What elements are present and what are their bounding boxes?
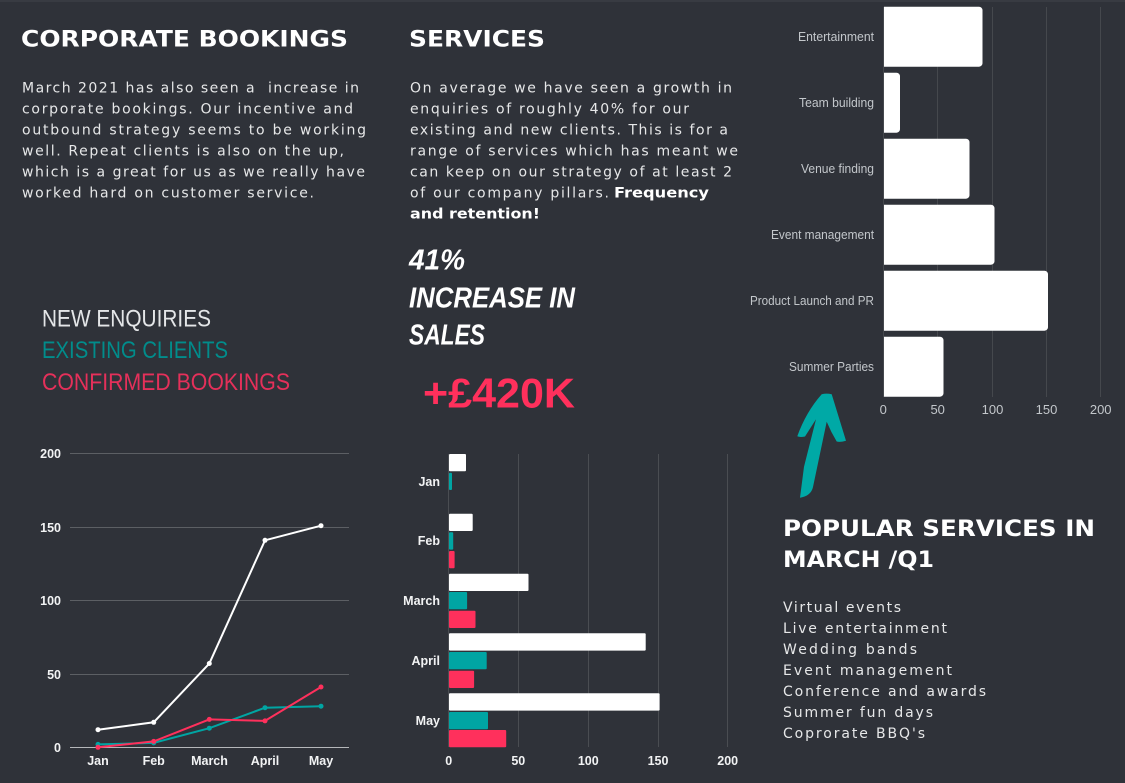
bar chart value axis labels: 100 [578,754,599,768]
bar chart month labels: April [412,654,440,668]
line chart: monthly trend [40,447,349,768]
line chart x axis labels: Feb [143,754,165,768]
heading: popular services: MARCH /Q1 [783,547,934,573]
heading: corporate bookings: CORPORATE BOOKINGS [21,26,348,52]
line chart y axis labels: 150 [40,521,61,535]
service value axis labels: 100 [982,402,1003,417]
list: popular services: Event management [783,663,952,679]
heading: popular services: POPULAR SERVICES IN [783,516,1095,542]
series: existing clients [96,704,324,747]
bar chart value axis labels: 0 [445,754,452,768]
text block: services description: range of services which has meant we [410,144,738,160]
text block: corporate bookings description [22,80,366,202]
text block: services description: On average we have seen a growth in [410,80,732,96]
bar chart value axis labels [445,754,738,768]
list: popular services: Coprorate BBQ's [783,726,925,742]
service value axis labels: 0 [880,402,887,417]
heading: popular services [783,516,1095,573]
legend: existing clients: EXISTING CLIENTS [42,337,228,364]
bars: services values [884,7,1048,397]
arrow: pointing up to services chart [797,394,846,498]
heading: services: SERVICES [409,26,545,52]
bars: February [449,514,473,568]
bar chart month labels [403,475,440,728]
panel: popular services [783,516,1095,742]
callout: 41% increase in sales: SALES [409,320,486,352]
list: popular services: Live entertainment [783,621,948,637]
bar chart value axis labels: 150 [648,754,668,768]
line chart x axis labels [87,754,333,768]
text block: services description: Frequency [614,186,709,202]
line chart x axis labels: Jan [87,754,109,768]
callout: +£420K: +£420K [423,369,575,416]
bar chart: monthly comparison [403,454,738,768]
text block: services description [410,80,738,222]
service category labels: Product Launch and PR [750,293,874,308]
bar chart value axis labels: 200 [717,754,738,768]
panel: corporate bookings [21,26,366,202]
list: popular services: Wedding bands [783,642,917,658]
text block: corporate bookings description: March 2021 has also seen a increase in [22,80,359,96]
panel: services [408,26,738,416]
text block: corporate bookings description: outbound strategy seems to be working [22,122,366,138]
text block: services description: enquiries of roughly 40% for our [410,102,689,118]
text block: services description: of our company pillars. [410,186,609,202]
line chart y axis labels: 100 [40,594,61,608]
text block: corporate bookings description: corporate bookings. Our incentive and [22,102,353,118]
bars: April [449,633,646,688]
callout: 41% increase in sales: 41% [408,244,465,276]
list: popular services [783,600,986,742]
callout: 41% increase in sales: INCREASE IN [409,282,576,314]
text block: corporate bookings description: which is a great for us as we really have [22,164,365,180]
line chart x axis labels: March [191,754,228,768]
bar chart month labels: March [403,594,440,608]
line chart y axis labels [40,447,61,755]
service category labels: Entertainment [798,29,874,44]
bar chart month labels: Feb [418,534,440,548]
bars: March [449,574,528,628]
text block: services description: can keep on our strategy of at least 2 [410,164,732,180]
legend: new enquiries: NEW ENQUIRIES [42,305,211,332]
service category labels: Team building [799,95,874,110]
line chart y axis labels: 200 [40,447,61,461]
bar chart: services popularity [750,7,1112,417]
service value axis labels: 50 [930,402,945,417]
line chart y axis labels: 50 [47,668,61,682]
bars: January [449,454,466,490]
list: popular services: Virtual events [783,600,901,616]
bars: May [449,693,660,747]
service category labels [750,29,874,374]
service value axis labels [880,402,1112,417]
service category labels: Event management [771,227,874,242]
service category labels: Venue finding [801,161,874,176]
list: popular services: Summer fun days [783,705,933,721]
callout: 41% increase in sales [408,244,576,352]
legend [42,305,290,396]
text block: services description: existing and new clients. This is for a [410,122,728,138]
series: new enquiries [96,523,324,732]
bar chart month labels: May [416,714,440,728]
service category labels: Summer Parties [789,359,874,374]
text block: services description: and retention! [410,206,540,222]
series: confirmed bookings [96,684,324,750]
line chart x axis labels: May [309,754,333,768]
bar chart value axis labels: 50 [511,754,525,768]
bar chart month labels: Jan [418,475,440,489]
line chart x axis labels: April [251,754,279,768]
service value axis labels: 200 [1090,402,1112,417]
text block: corporate bookings description: well. Repeat clients is also on the up, [22,144,344,160]
legend: confirmed bookings: CONFIRMED BOOKINGS [42,369,290,396]
line chart y axis labels: 0 [54,741,61,755]
list: popular services: Conference and awards [783,684,986,700]
text block: corporate bookings description: worked hard on customer service. [22,186,314,202]
service value axis labels: 150 [1036,402,1057,417]
